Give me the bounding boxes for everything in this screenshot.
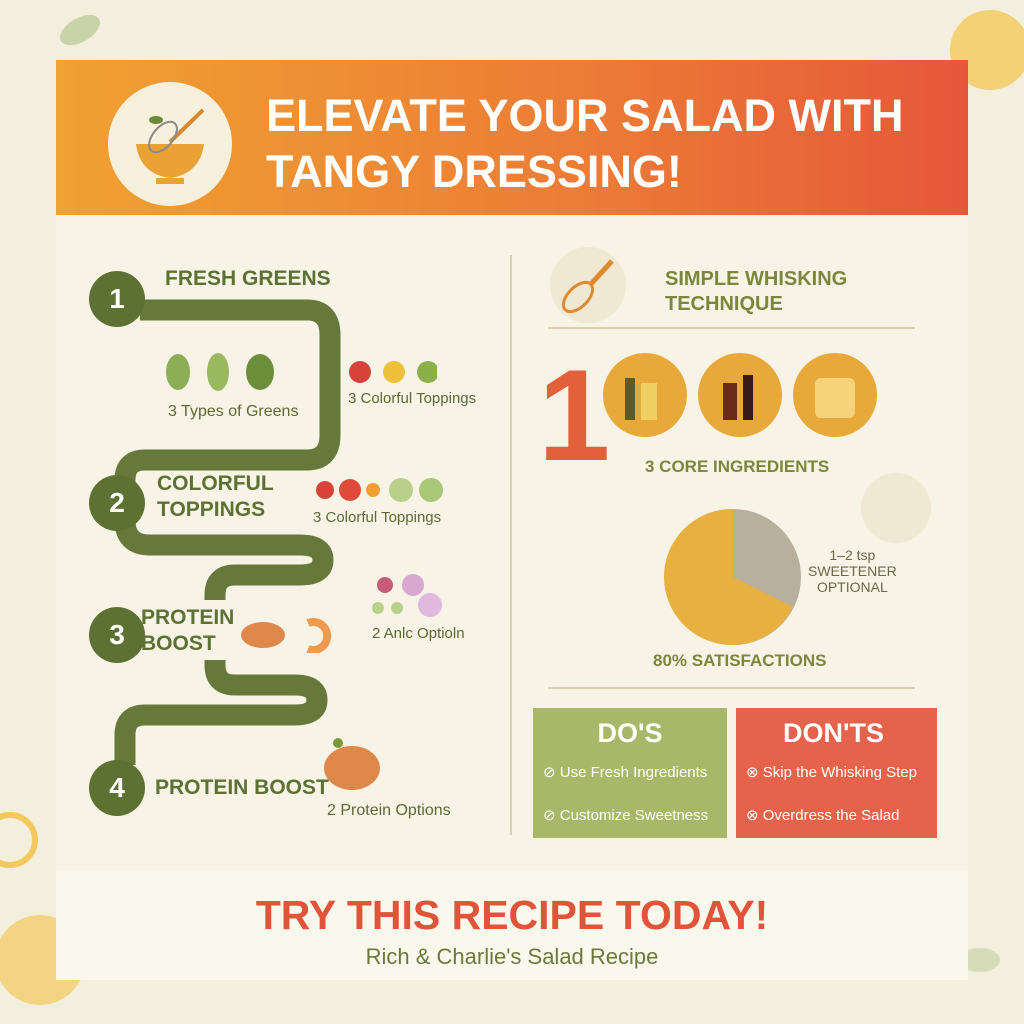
panel: winding steps: 2 Anlc Optioln [372, 625, 465, 642]
step 3 [89, 607, 145, 663]
panel: don'ts: DON'TS [783, 718, 884, 748]
ingredient icons [603, 353, 877, 437]
panel: don'ts: ⊗ Overdress the Salad [746, 807, 899, 824]
header banner [56, 60, 968, 215]
panel: winding steps: PROTEIN BOOST [155, 776, 329, 799]
panel: winding steps: 3 Types of Greens [168, 403, 298, 420]
panel: winding steps: BOOST [141, 632, 216, 655]
panel: winding steps: 2 Protein Options [327, 802, 451, 819]
icon: whisk bowl [108, 82, 232, 206]
step 2: 2 [109, 487, 125, 518]
footer: Rich & Charlie's Salad Recipe [366, 944, 658, 969]
panel: winding steps: 3 Colorful Toppings [313, 509, 441, 526]
step 1 [89, 271, 145, 327]
panel: whisking technique [538, 247, 931, 689]
big number 1: 1 [538, 342, 610, 488]
panel: whisking technique: SWEETENER [808, 563, 897, 579]
panel: whisking technique: 3 CORE INGREDIENTS [645, 457, 829, 476]
icon: whisk [550, 247, 626, 323]
panel: whisking technique: OPTIONAL [817, 579, 888, 595]
panel: don'ts [736, 708, 937, 838]
panel: don'ts: ⊗ Skip the Whisking Step [746, 764, 917, 781]
step 4 [89, 760, 145, 816]
footer [56, 870, 968, 980]
icon: leaves [166, 353, 274, 391]
panel: winding steps: PROTEIN [141, 606, 234, 629]
step 4: 4 [109, 772, 125, 803]
panel: whisking technique: 1–2 tsp [829, 547, 875, 563]
panel: whisking technique: 80% SATISFACTIONS [653, 651, 826, 670]
pie chart [664, 509, 801, 645]
panel: do's: DO'S [598, 718, 662, 748]
panel: do's [533, 708, 727, 838]
panel: do's: ⊘ Customize Sweetness [543, 807, 708, 824]
panel: winding steps [89, 267, 476, 819]
panel: winding steps: 3 Colorful Toppings [348, 390, 476, 407]
panel: winding steps: COLORFUL [157, 472, 274, 495]
title: TANGY DRESSING! [266, 146, 682, 197]
footer: TRY THIS RECIPE TODAY! [256, 892, 768, 938]
main panel [56, 215, 968, 870]
title: ELEVATE YOUR SALAD WITH [266, 90, 904, 141]
panel: do's: ⊘ Use Fresh Ingredients [543, 764, 707, 781]
panel: whisking technique: TECHNIQUE [665, 293, 783, 315]
title [266, 90, 904, 197]
step 3: 3 [109, 619, 125, 650]
panel: winding steps: TOPPINGS [157, 498, 265, 521]
panel: winding steps: FRESH GREENS [165, 267, 331, 290]
step 1: 1 [109, 283, 125, 314]
step 2 [89, 475, 145, 531]
panel: whisking technique: SIMPLE WHISKING [665, 268, 847, 290]
